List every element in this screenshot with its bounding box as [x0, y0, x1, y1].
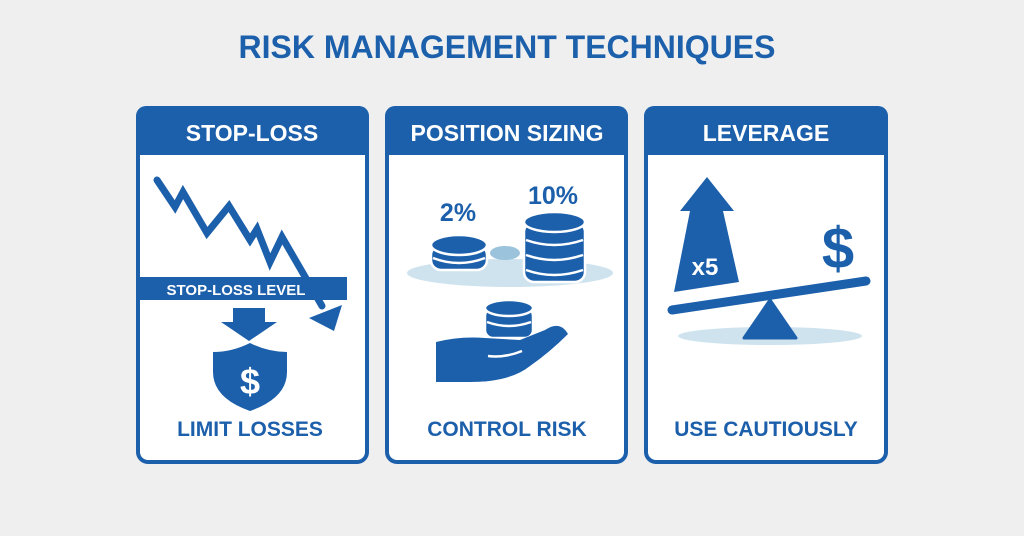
stop-loss level band	[138, 277, 347, 300]
icon: seesaw	[672, 281, 866, 338]
label: limit losses: LIMIT LOSSES	[177, 418, 323, 441]
header: stop-loss: STOP-LOSS	[186, 120, 318, 146]
header: leverage	[644, 106, 888, 155]
icon: down arrow	[221, 308, 277, 341]
icon: x5 arrow	[674, 177, 739, 292]
header: leverage: LEVERAGE	[703, 120, 829, 146]
header: position sizing	[385, 106, 628, 155]
icon: big coin stack	[524, 212, 585, 282]
title: RISK MANAGEMENT TECHNIQUES	[239, 29, 775, 65]
header: position sizing: POSITION SIZING	[411, 120, 603, 146]
panel: stop-loss	[136, 106, 369, 462]
icon: small coin stack	[431, 235, 487, 270]
percent labels: 2%	[440, 199, 476, 227]
icon: hand holding coins	[436, 300, 568, 382]
shadow ellipse	[678, 327, 862, 345]
label: control risk: CONTROL RISK	[427, 418, 587, 441]
icon: dollar: $	[822, 216, 854, 281]
label: use cautiously: USE CAUTIOUSLY	[674, 418, 858, 441]
shadow ellipse	[407, 259, 613, 287]
stop-loss level band: STOP-LOSS LEVEL	[167, 282, 305, 299]
percent labels: 10%	[528, 182, 578, 210]
chart: falling zigzag arrow	[157, 180, 342, 331]
icon: x5 arrow: x5	[692, 254, 718, 281]
percent labels	[440, 182, 578, 227]
icon: dollar shield: $	[240, 361, 260, 402]
icon: dollar shield	[213, 343, 287, 411]
panel: position sizing	[385, 106, 628, 462]
panel: leverage	[644, 106, 888, 462]
header: stop-loss	[136, 106, 369, 155]
